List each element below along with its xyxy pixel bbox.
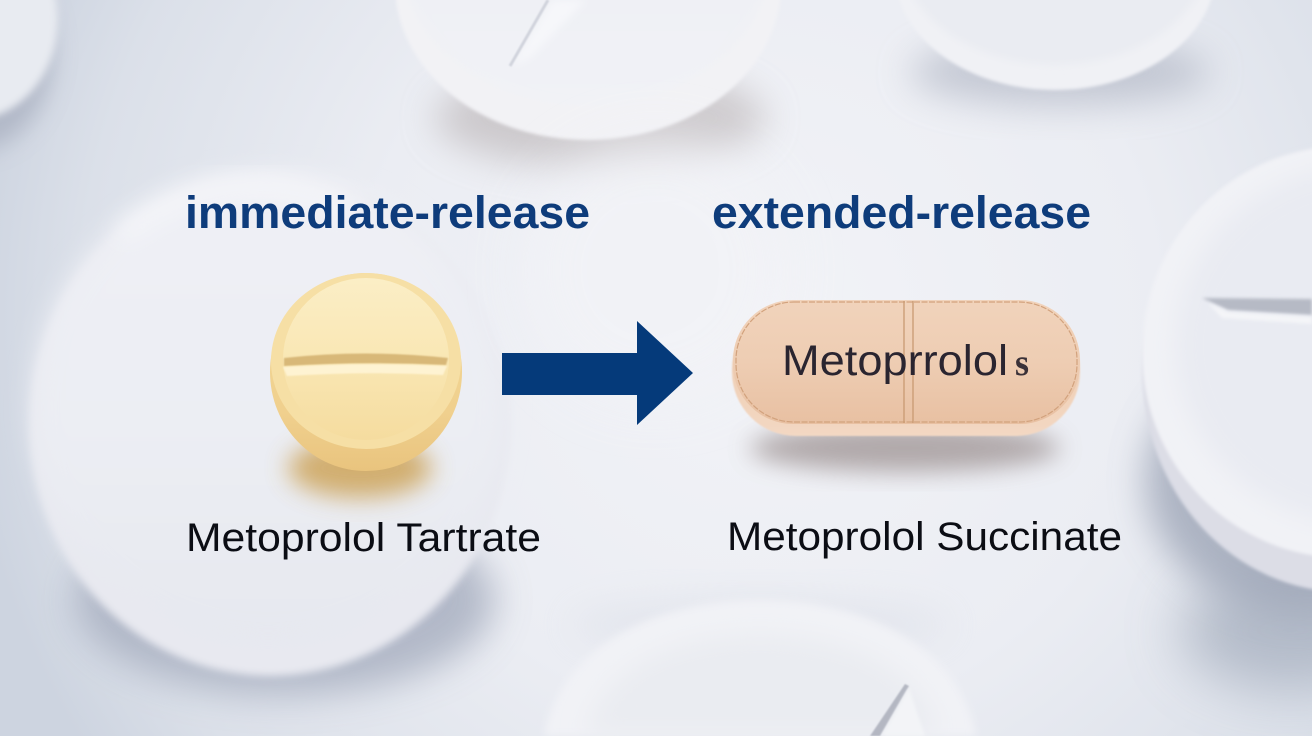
capsule: tan pill: [732, 300, 1080, 436]
capsule: shadow: [750, 424, 1060, 472]
tablet: large left: [30, 172, 510, 695]
arrow: [502, 321, 693, 425]
tablet: top right: [894, 0, 1216, 106]
label: Metoprolol Tartrate: Metoprolol Tartrate: [186, 516, 541, 560]
centre glow: [525, 140, 785, 400]
capsule imprint end glyph: s: [1015, 342, 1029, 384]
tablet: yellow round pill: [270, 273, 462, 498]
tablet: right: [1142, 146, 1312, 615]
capsule imprint: Metoprrolol: [782, 337, 1008, 385]
heading: immediate-release: immediate-release: [185, 187, 590, 238]
tablet: top left corner: [0, 0, 58, 150]
background shadow: lower right: [1180, 570, 1312, 690]
heading: extended-release: extended-release: [712, 187, 1091, 238]
label: Metoprolol Succinate: Metoprolol Succinate: [727, 515, 1122, 559]
tablet: top centre: [395, 0, 781, 168]
tablet: bottom centre: [544, 597, 976, 736]
